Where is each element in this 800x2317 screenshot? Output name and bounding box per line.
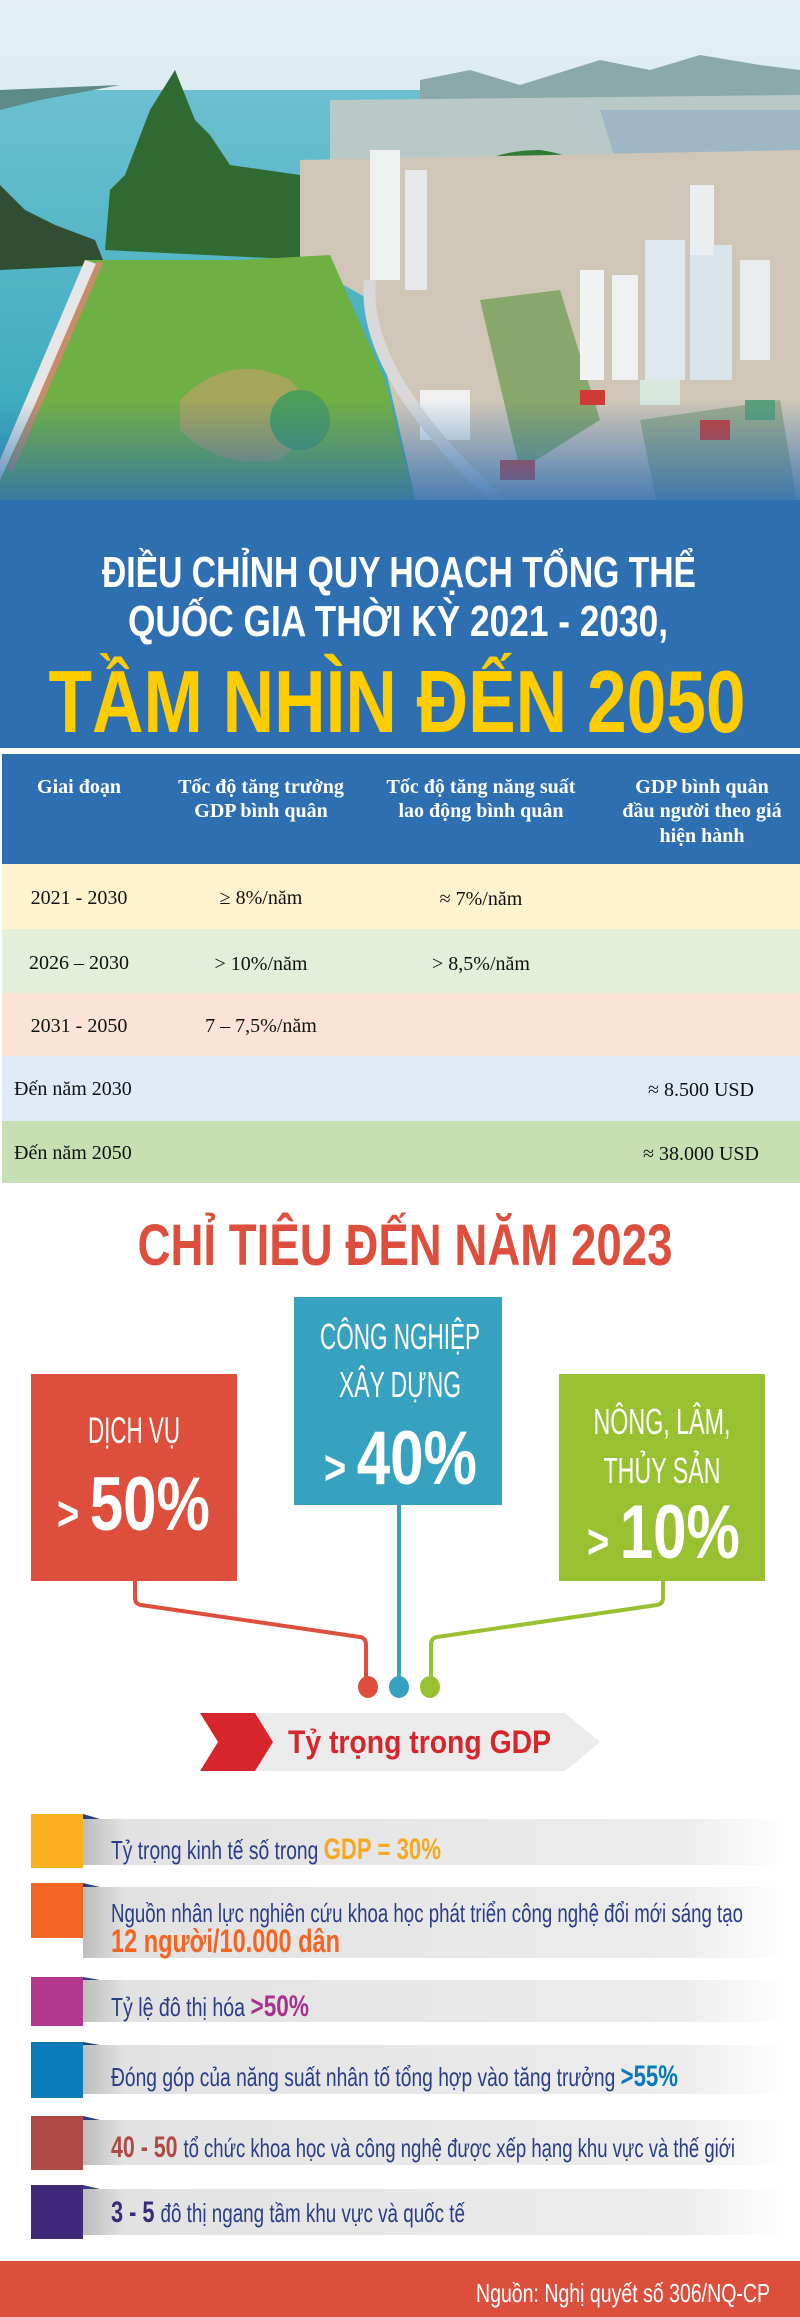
- item 5: [31, 2116, 786, 2170]
- row 2026-2030: 2026 – 2030: [29, 952, 129, 974]
- table header: Tốc độ tăng năng suất: [387, 776, 576, 798]
- row 2050 target: [2, 1121, 800, 1183]
- title band: [0, 500, 800, 751]
- item 6: 3 - 5 đô thị ngang tầm khu vực và quốc tế: [111, 2196, 465, 2229]
- row 2031-2050: 2031 - 2050: [31, 1015, 127, 1037]
- item 6: [31, 2185, 786, 2239]
- box: cong nghiep: [294, 1297, 502, 1505]
- box: nong lam thuy san: THỦY SẢN: [604, 1449, 720, 1491]
- table header: GDP bình quân: [635, 776, 769, 798]
- row 2030 target: Đến năm 2030: [14, 1078, 132, 1100]
- table header: [2, 754, 800, 864]
- item 1: [31, 1814, 786, 1868]
- item 4: [31, 2042, 786, 2098]
- item 2: [31, 1883, 786, 1959]
- photo: aerial city: [0, 0, 800, 550]
- item 2: 12 người/10.000 dân: [111, 1923, 340, 1959]
- dots: [358, 1676, 440, 1698]
- table: [2, 754, 800, 1183]
- item 3: [31, 1977, 786, 2026]
- row 2026-2030: > 10%/năm: [215, 953, 308, 975]
- box: nong lam thuy san: [559, 1374, 765, 1581]
- banner: ty trong trong GDP: [200, 1713, 600, 1771]
- item 4: Đóng góp của năng suất nhân tố tổng hợp vào tăng trưởng >55%: [111, 2060, 678, 2093]
- row 2031-2050: 7 – 7,5%/năm: [205, 1015, 317, 1037]
- row 2031-2050: [2, 993, 800, 1056]
- table header: GDP bình quân: [194, 800, 328, 822]
- table header: lao động bình quân: [398, 800, 564, 822]
- row 2050 target: ≈ 38.000 USD: [643, 1143, 759, 1165]
- box: cong nghiep: XÂY DỰNG: [339, 1364, 461, 1405]
- table header: Giai đoạn: [37, 776, 121, 798]
- row 2026-2030: > 8,5%/năm: [432, 953, 530, 975]
- row 2021-2030: 2021 - 2030: [31, 887, 127, 909]
- footer: source: [0, 2261, 800, 2317]
- box: dich vu: > 50%: [57, 1462, 210, 1547]
- box: nong lam thuy san: > 10%: [587, 1490, 740, 1575]
- item 1: Tỷ trọng kinh tế số trong GDP = 30%: [111, 1833, 441, 1866]
- box: cong nghiep: CÔNG NGHIỆP: [320, 1316, 480, 1357]
- row 2021-2030: ≥ 8%/năm: [220, 887, 303, 909]
- table header: đầu người theo giá: [622, 800, 782, 822]
- box: dich vu: [31, 1374, 237, 1581]
- row 2030 target: [2, 1056, 800, 1121]
- row 2030 target: ≈ 8.500 USD: [648, 1079, 754, 1101]
- title line 2: QUỐC GIA THỜI KỲ 2021 - 2030,: [128, 595, 668, 646]
- table header: hiện hành: [659, 825, 745, 847]
- box: nong lam thuy san: NÔNG, LÂM,: [594, 1401, 730, 1442]
- box: cong nghiep: > 40%: [324, 1416, 477, 1501]
- row 2021-2030: ≈ 7%/năm: [440, 888, 523, 910]
- row 2021-2030: [2, 864, 800, 929]
- connector lines: [135, 1505, 663, 1685]
- row 2050 target: Đến năm 2050: [14, 1142, 132, 1164]
- row 2026-2030: [2, 929, 800, 993]
- box: dich vu: DỊCH VỤ: [88, 1410, 180, 1451]
- table header: Tốc độ tăng trưởng: [178, 776, 344, 798]
- heading: chi tieu: CHỈ TIÊU ĐẾN NĂM 2023: [138, 1213, 672, 1278]
- item 3: Tỷ lệ đô thị hóa >50%: [111, 1990, 309, 2023]
- banner: ty trong trong GDP: Tỷ trọng trong GDP: [288, 1724, 551, 1760]
